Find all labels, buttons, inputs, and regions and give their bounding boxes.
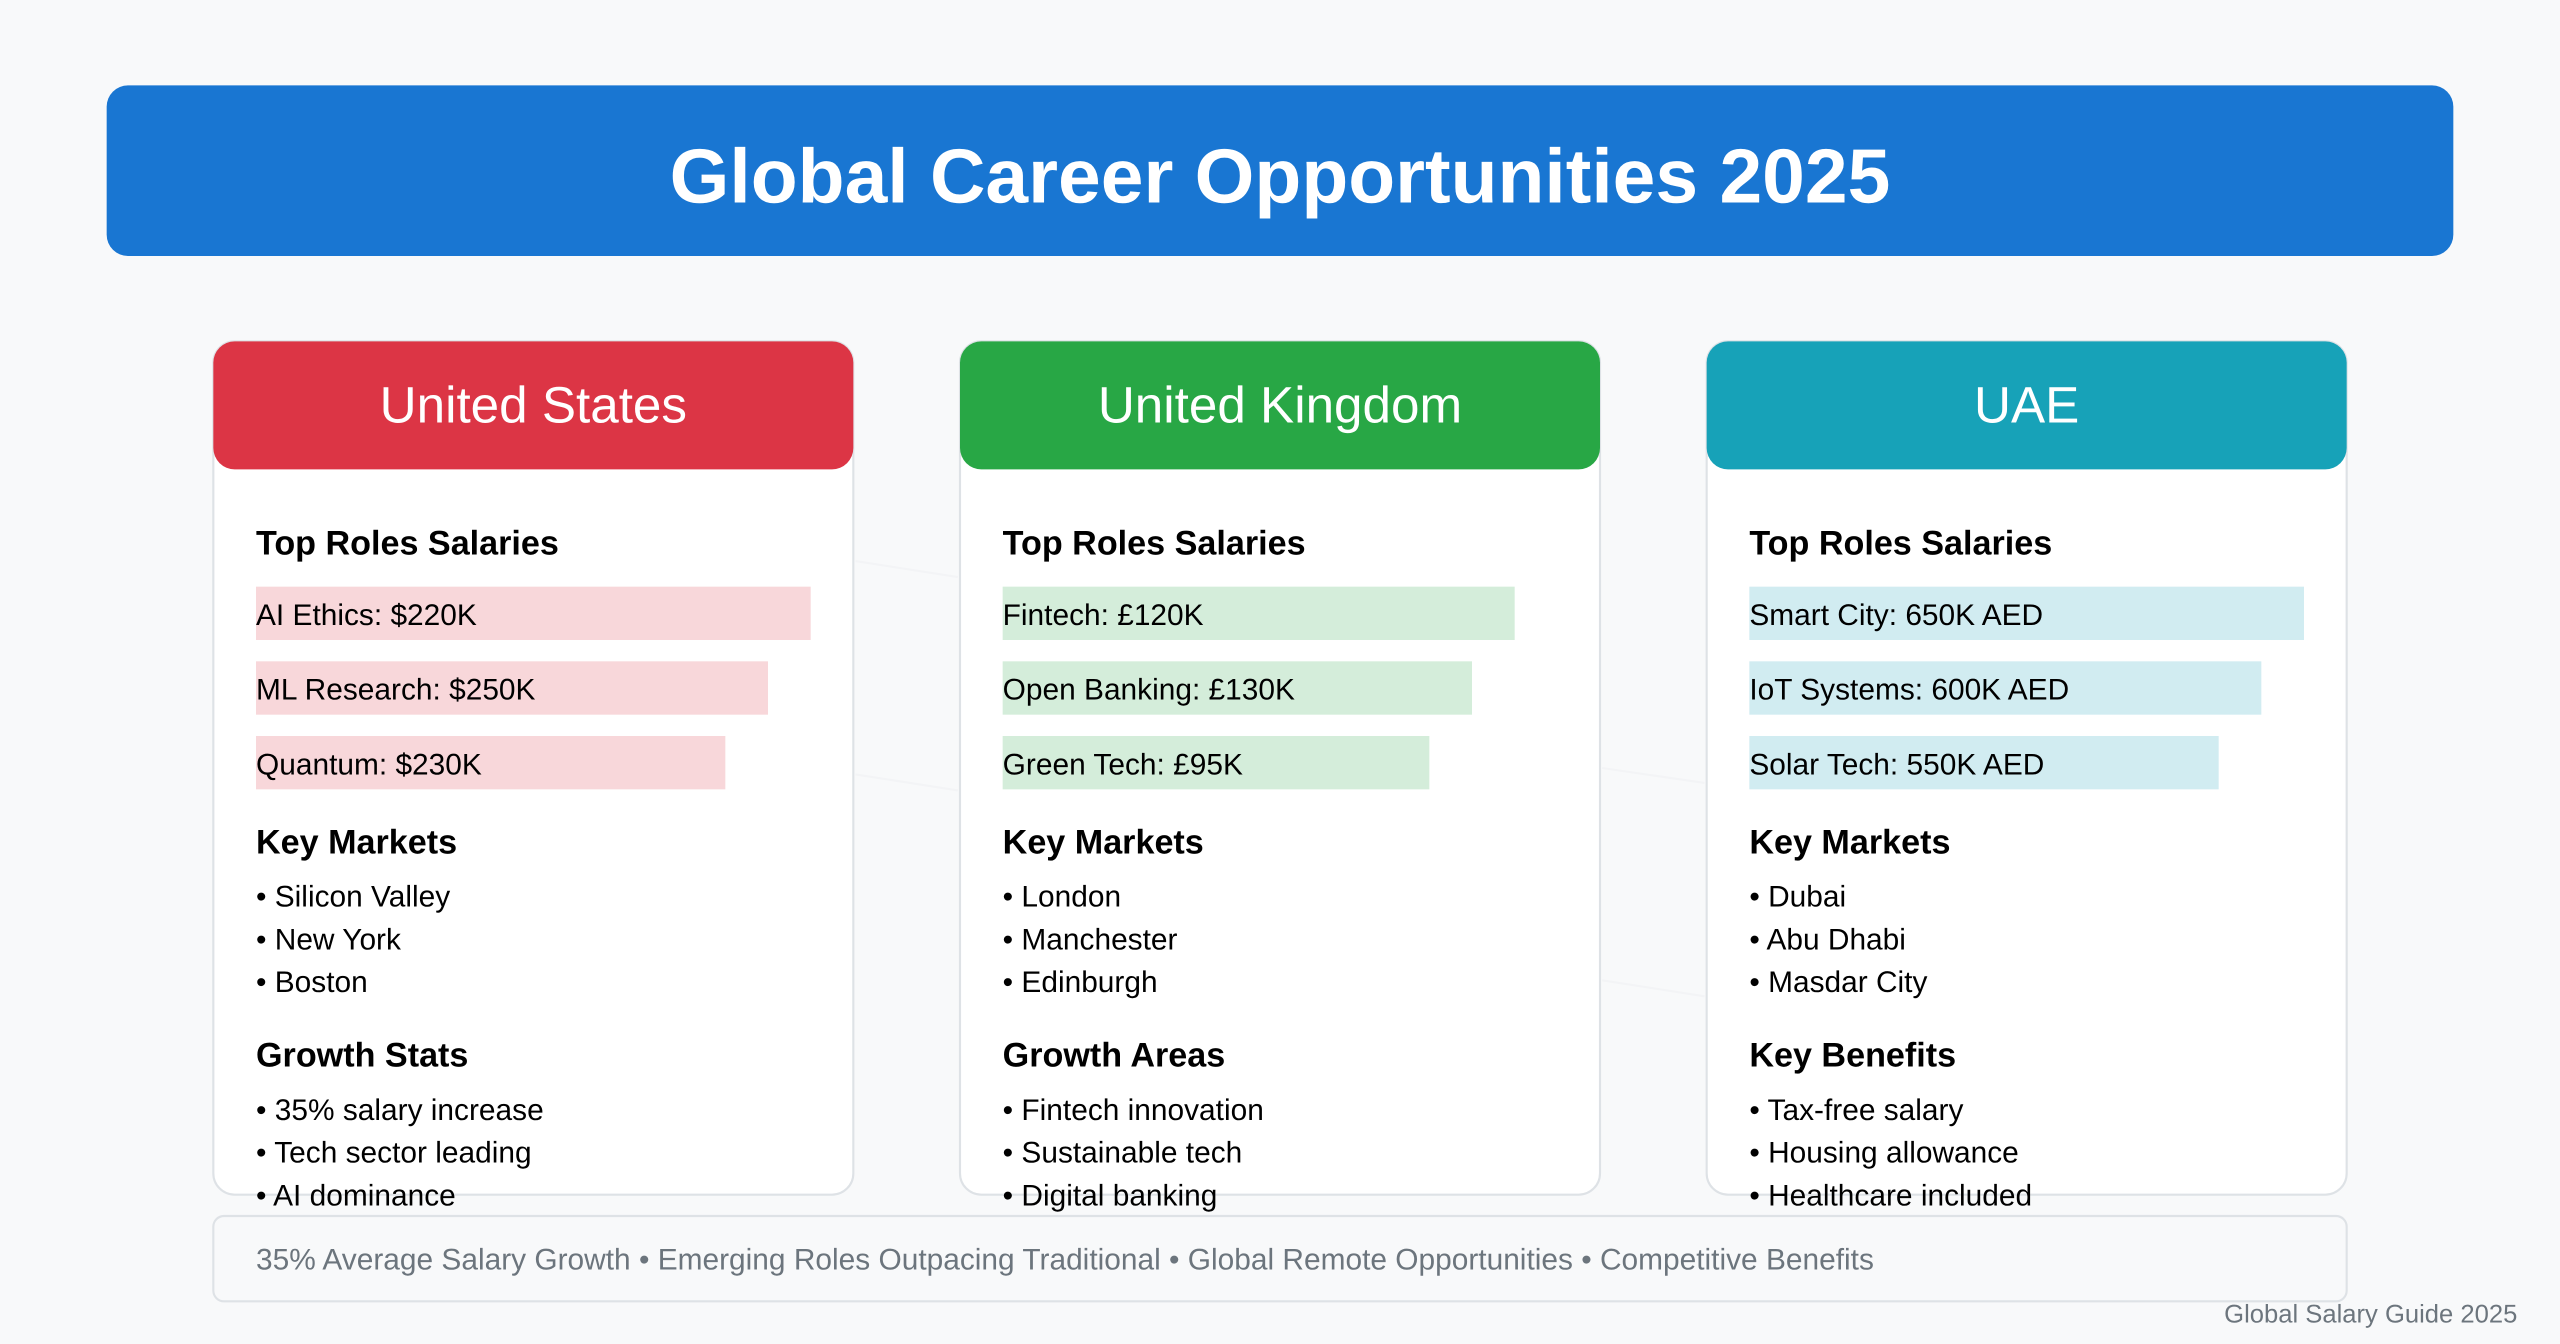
panel: United Kingdom	[960, 341, 1600, 1212]
salary bars	[1749, 587, 2304, 789]
header: UAE	[1707, 341, 2347, 469]
heading: growth areas: Growth Areas	[1003, 1039, 1225, 1075]
salary bars	[256, 587, 811, 789]
source note: Global Salary Guide 2025	[2224, 1299, 2518, 1329]
heading: key markets: Key Markets	[1003, 826, 1204, 862]
list: growth stats: • AI dominance	[256, 1178, 456, 1212]
list: key markets: • Edinburgh	[1003, 964, 1158, 998]
salary bars: Quantum: $230K	[256, 747, 483, 781]
panel: UAE	[1707, 341, 2347, 1212]
list: growth areas: • Sustainable tech	[1003, 1135, 1242, 1169]
heading: key benefits: Key Benefits	[1749, 1039, 1956, 1075]
heading: key markets: Key Markets	[1749, 826, 1951, 862]
list: growth stats: • Tech sector leading	[256, 1135, 532, 1169]
list: key markets: • Abu Dhabi	[1749, 922, 1906, 956]
salary bars: AI Ethics: $220K	[256, 597, 478, 631]
salary bars: ML Research: $250K	[256, 672, 537, 706]
list: key markets: • Boston	[256, 964, 368, 998]
summary bar	[213, 1216, 2347, 1301]
list: key benefits: • Tax-free salary	[1749, 1092, 1963, 1126]
list: key markets: • Manchester	[1003, 922, 1178, 956]
salary bars: Solar Tech: 550K AED	[1749, 747, 2044, 781]
header: UAE: UAE	[1974, 378, 2079, 435]
header: United States	[213, 341, 853, 469]
salary bars: IoT Systems: 600K AED	[1749, 672, 2069, 706]
list: growth stats: • 35% salary increase	[256, 1092, 544, 1126]
salary bars: Open Banking: £130K	[1003, 672, 1296, 706]
header: United Kingdom: United Kingdom	[1098, 378, 1462, 435]
salary bars: Fintech: £120K	[1003, 597, 1205, 631]
list: key markets: • London	[1003, 879, 1121, 913]
summary bar: 35% Average Salary Growth • Emerging Roles Outpacing Traditional • Global Remote Opportunities • Competitive Benefits	[256, 1242, 1874, 1276]
title banner	[107, 85, 2453, 256]
list: growth stats	[256, 1092, 544, 1212]
list: key markets	[1749, 879, 1927, 998]
heading: top roles salaries: Top Roles Salaries	[256, 527, 559, 563]
list: growth areas: • Fintech innovation	[1003, 1092, 1264, 1126]
list: key markets	[256, 879, 450, 998]
list: growth areas	[1003, 1092, 1264, 1212]
header: United States: United States	[380, 378, 687, 435]
heading: top roles salaries: Top Roles Salaries	[1749, 527, 2052, 563]
list: key benefits: • Housing allowance	[1749, 1135, 2019, 1169]
list: key benefits	[1749, 1092, 2032, 1212]
heading: growth stats: Growth Stats	[256, 1039, 469, 1075]
list: key markets: • New York	[256, 922, 403, 956]
list: key markets	[1003, 879, 1178, 998]
heading: key markets: Key Markets	[256, 826, 457, 862]
header: United Kingdom	[960, 341, 1600, 469]
list: growth areas: • Digital banking	[1003, 1178, 1217, 1212]
list: key benefits: • Healthcare included	[1749, 1178, 2032, 1212]
heading: top roles salaries: Top Roles Salaries	[1003, 527, 1306, 563]
list: key markets: • Silicon Valley	[256, 879, 450, 913]
list: key markets: • Dubai	[1749, 879, 1846, 913]
salary bars	[1003, 587, 1515, 789]
panel: United States	[213, 341, 853, 1212]
salary bars: Green Tech: £95K	[1003, 747, 1244, 781]
title: Global Career Opportunities 2025	[670, 132, 1890, 220]
list: key markets: • Masdar City	[1749, 964, 1927, 998]
salary bars: Smart City: 650K AED	[1749, 597, 2043, 631]
